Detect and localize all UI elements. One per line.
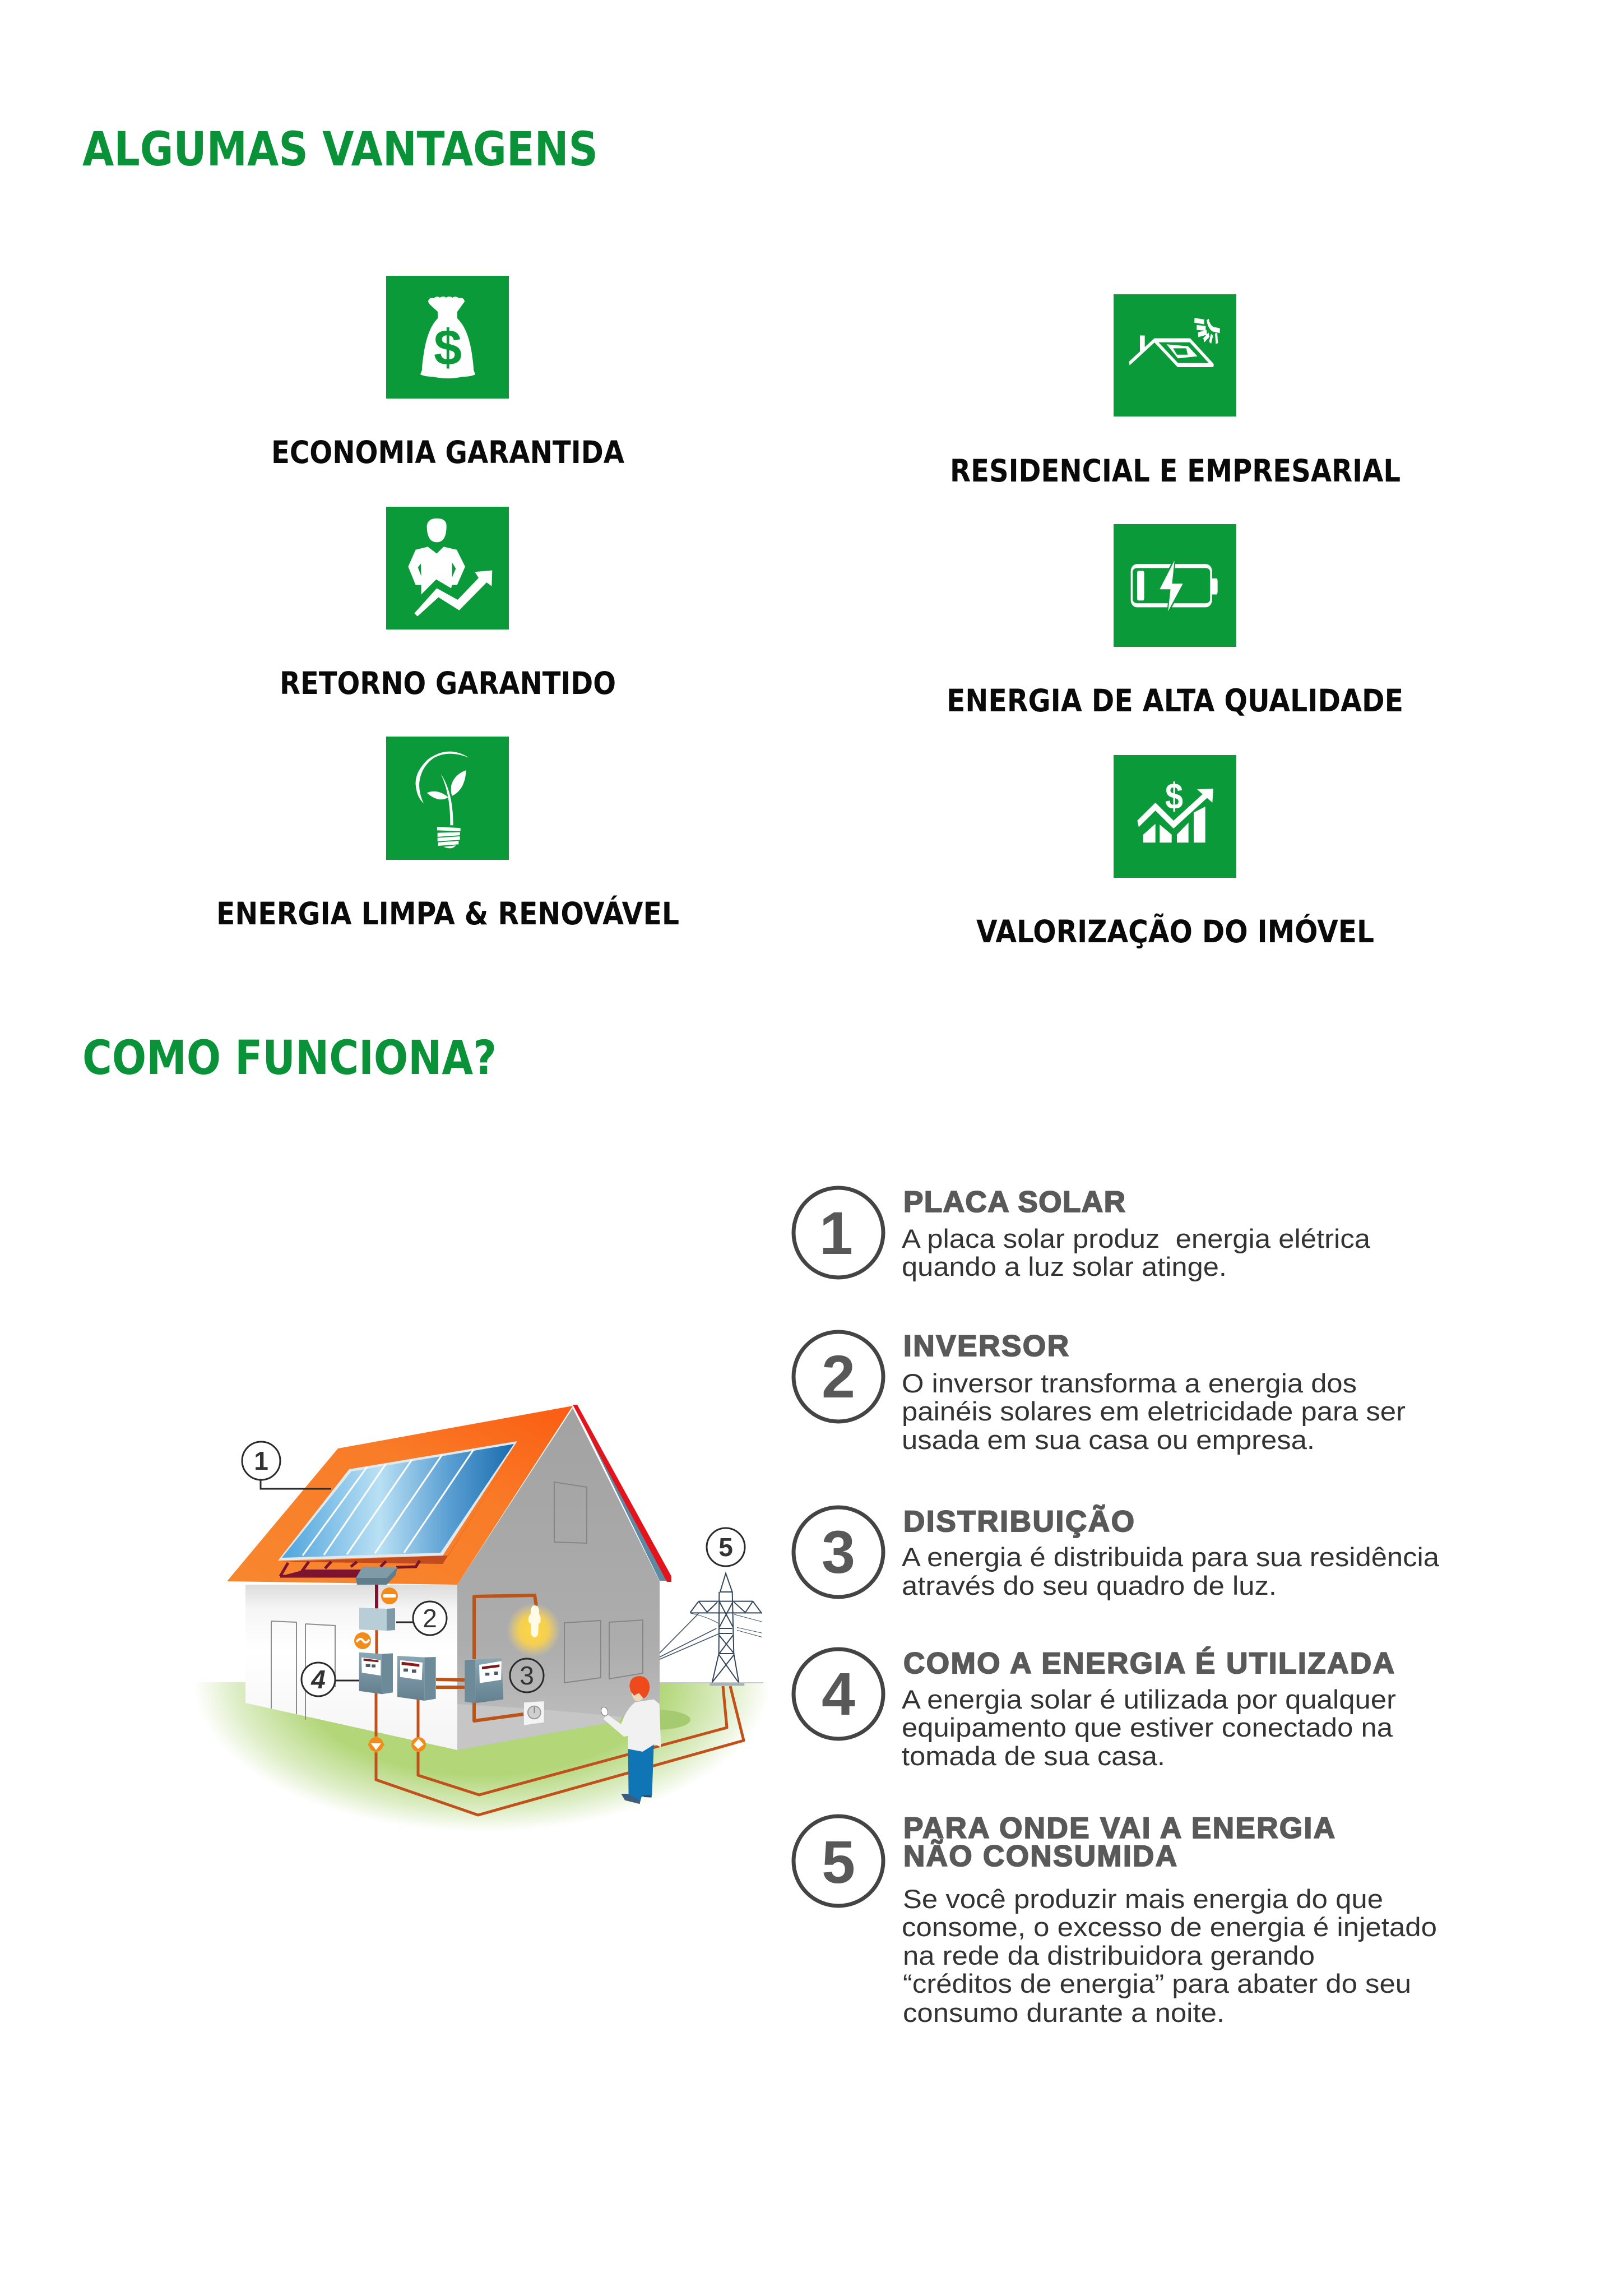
step 4 text: A energia solar é utilizada por qualquer [902, 1684, 1396, 1714]
light bulb with glow [507, 1603, 560, 1657]
label: ENERGIA DE ALTA QUALIDADE [947, 683, 1403, 719]
icon: battery with bolt [1114, 524, 1236, 647]
step 5 text: “créditos de energia” para abater do seu [903, 1969, 1411, 1998]
callout 1: 1 [254, 1446, 268, 1475]
callout 4: 4 [310, 1665, 326, 1694]
step 5 text: na rede da distribuidora gerando [903, 1941, 1315, 1970]
number circle 2: 2 [822, 1343, 855, 1410]
callout 5: 5 [718, 1533, 733, 1562]
number circle 5: 5 [822, 1828, 855, 1896]
step 5 text [902, 1884, 1437, 2027]
step 5 text: Se você produzir mais energia do que [903, 1884, 1383, 1914]
solar panel [278, 1441, 517, 1561]
icon: dc symbol [381, 1587, 398, 1604]
meter 3 [465, 1658, 503, 1703]
callout 4 [302, 1663, 359, 1696]
doors [271, 1621, 335, 1720]
step 2 text: O inversor transforma a energia dos [902, 1368, 1357, 1398]
icon: rising value chart [1114, 755, 1236, 878]
number circle 2 [794, 1332, 883, 1422]
step 2 title: INVERSOR [903, 1330, 1069, 1363]
panel: energia limpa e renovavel [216, 737, 679, 932]
house front wall [245, 1585, 457, 1750]
step 3: distribuicao [794, 1505, 1440, 1600]
step 4: como a energia e utilizada [794, 1646, 1396, 1771]
step 1: placa solar [794, 1186, 1371, 1281]
label: ECONOMIA GARANTIDA [271, 434, 624, 470]
panel: energia de alta qualidade [947, 524, 1403, 719]
house gable wall [457, 1408, 660, 1750]
roof edge [575, 1407, 670, 1581]
icon: money bag: $ [434, 320, 462, 376]
panel: residencial e empresarial [950, 294, 1401, 489]
panel: retorno garantido [280, 507, 616, 701]
inverter [359, 1608, 395, 1631]
number circle 4: 4 [822, 1660, 855, 1728]
callout 3 [510, 1659, 544, 1692]
step 4 text: tomada de sua casa. [902, 1741, 1165, 1771]
icon: person with rising arrow [386, 507, 509, 629]
step 3 text: A energia é distribuida para sua residência [902, 1542, 1440, 1572]
step 2 text: usada em sua casa ou empresa. [902, 1425, 1315, 1455]
label: ENERGIA LIMPA & RENOVÁVEL [216, 896, 679, 932]
step 3 text [902, 1542, 1440, 1600]
horizon line [660, 1682, 763, 1683]
label: RETORNO GARANTIDO [280, 665, 616, 701]
wires [376, 1584, 744, 1815]
step 5 title: NÃO CONSUMIDA [903, 1839, 1177, 1873]
number circle 5 [794, 1816, 883, 1906]
label: RESIDENCIAL E EMPRESARIAL [950, 453, 1401, 489]
number circle 4 [794, 1649, 883, 1739]
junction box [356, 1567, 397, 1585]
step 1 text [902, 1224, 1371, 1281]
transmission tower [690, 1573, 762, 1686]
step 4 title: COMO A ENERGIA É UTILIZADA [903, 1646, 1394, 1680]
icon: house roof with solar panel and sun [1114, 294, 1236, 416]
callout 2 [396, 1601, 447, 1635]
step 2: inversor [794, 1330, 1406, 1455]
step 5 text: consumo durante a noite. [903, 1998, 1225, 2027]
meter 2 [397, 1656, 436, 1701]
step 4 text: equipamento que estiver conectado na [902, 1712, 1393, 1742]
panel shadow [280, 1445, 517, 1564]
number circle 1 [794, 1188, 883, 1277]
callout 5 [707, 1528, 745, 1566]
wall light reflection [457, 1704, 660, 1750]
icon: plant in light bulb [386, 737, 509, 860]
callout 1 [242, 1442, 331, 1489]
step 5 title [903, 1812, 1335, 1873]
panel wires [280, 1561, 420, 1576]
panel: economia garantida [271, 276, 624, 470]
step 2 text [902, 1368, 1406, 1455]
number circle 1: 1 [819, 1199, 853, 1267]
icon: money bag [386, 276, 509, 399]
step 5: para onde vai a energia nao consumida [794, 1812, 1437, 2027]
step 5 text: consome, o excesso de energia é injetado [902, 1912, 1437, 1942]
step 3 text: através do seu quadro de luz. [902, 1571, 1277, 1600]
heading: como funciona: COMO FUNCIONA? [82, 1030, 497, 1085]
step 1 title: PLACA SOLAR [903, 1186, 1125, 1219]
power lines behind house [659, 1613, 718, 1660]
person shadow [621, 1710, 690, 1730]
step 1 text: quando a luz solar atinge. [902, 1252, 1227, 1281]
step 2 text: painéis solares em eletricidade para ser [902, 1396, 1406, 1426]
step 4 text [902, 1684, 1396, 1771]
step 1 text: A placa solar produz energia elétrica [902, 1224, 1371, 1253]
meter 1 [359, 1652, 393, 1694]
roof [227, 1406, 573, 1585]
heading: algumas vantagens: ALGUMAS VANTAGENS [82, 122, 598, 177]
socket [524, 1701, 544, 1725]
connection icons [368, 1737, 426, 1752]
callout 3: 3 [520, 1661, 534, 1690]
number circle 3 [794, 1507, 883, 1597]
illustration: solar house system [193, 1405, 771, 1836]
icon: rising value chart: $ [1165, 775, 1183, 817]
number circle 3: 3 [822, 1518, 855, 1586]
callout 2: 2 [423, 1604, 437, 1633]
gable windows [554, 1482, 643, 1683]
step 3 title: DISTRIBUIÇÃO [903, 1505, 1134, 1538]
step 5 title: PARA ONDE VAI A ENERGIA [903, 1812, 1335, 1845]
ground [193, 1682, 771, 1836]
icon: ac symbol [354, 1632, 371, 1649]
label: VALORIZAÇÃO DO IMÓVEL [976, 913, 1374, 950]
person [600, 1676, 661, 1804]
panel: valorizacao do imovel [976, 755, 1374, 950]
